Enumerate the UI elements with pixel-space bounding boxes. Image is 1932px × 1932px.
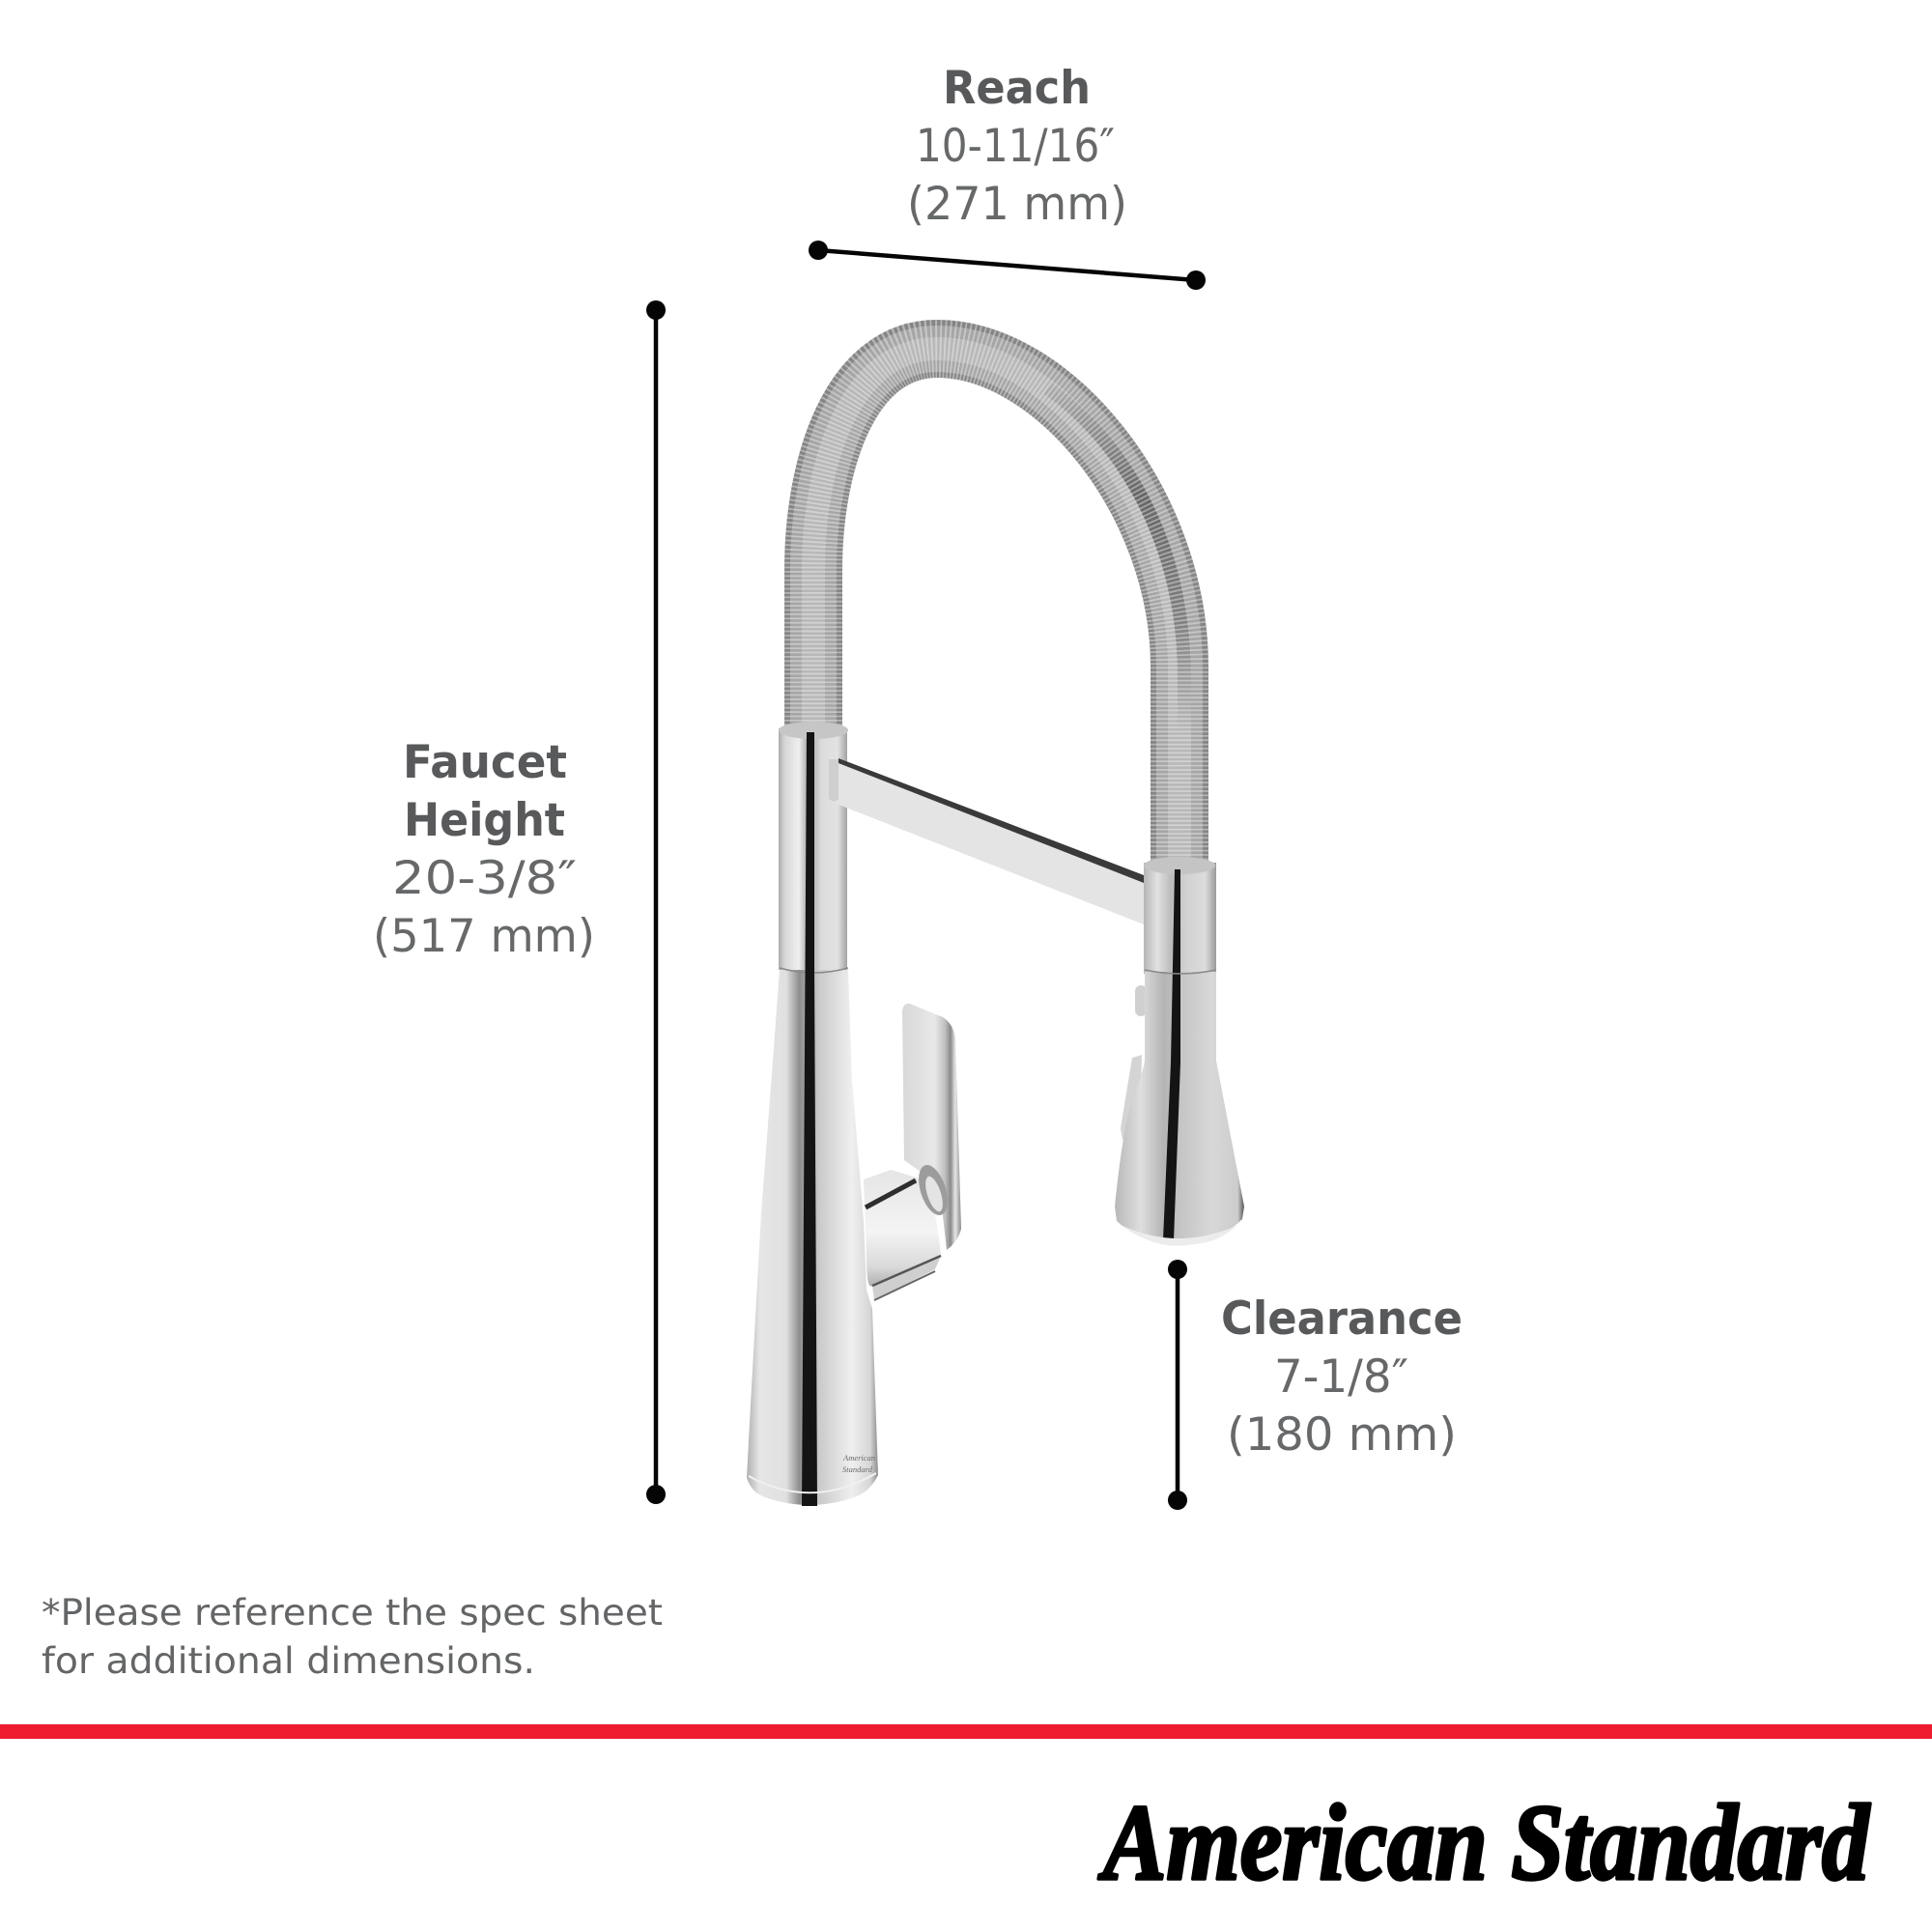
faucet height label <box>373 736 595 963</box>
footnote <box>42 1592 663 1682</box>
faucet height label: 20-3/8″ <box>392 852 577 905</box>
red divider band <box>0 1724 1932 1739</box>
faucet height label: Faucet <box>403 736 567 789</box>
clearance label: Clearance <box>1221 1293 1463 1346</box>
faucet height dimension line <box>646 300 666 1504</box>
reach label: Reach <box>943 62 1091 115</box>
logo mark on faucet base: American <box>842 1453 875 1463</box>
reach dimension line <box>809 241 1206 290</box>
footnote: *Please reference the spec sheet <box>42 1592 663 1634</box>
reach label: (271 mm) <box>907 178 1127 231</box>
clearance label: 7-1/8″ <box>1274 1350 1408 1404</box>
logo mark on faucet base: Standard <box>842 1464 873 1474</box>
pull-down support bar <box>829 757 1144 924</box>
logo mark on faucet base <box>842 1453 875 1474</box>
reach label <box>907 62 1127 231</box>
footnote: for additional dimensions. <box>42 1640 535 1682</box>
pull-down sprayer <box>1115 857 1244 1246</box>
clearance dimension line <box>1168 1260 1187 1510</box>
faucet column <box>747 722 878 1506</box>
flexible spring hose <box>813 349 1184 869</box>
clearance label <box>1221 1293 1463 1462</box>
lever handle and neck <box>864 1004 961 1300</box>
faucet height label: Height <box>404 794 565 847</box>
reach label: 10-11/16″ <box>916 120 1115 173</box>
faucet illustration <box>747 349 1244 1506</box>
clearance label: (180 mm) <box>1227 1408 1457 1462</box>
faucet height label: (517 mm) <box>373 910 595 963</box>
